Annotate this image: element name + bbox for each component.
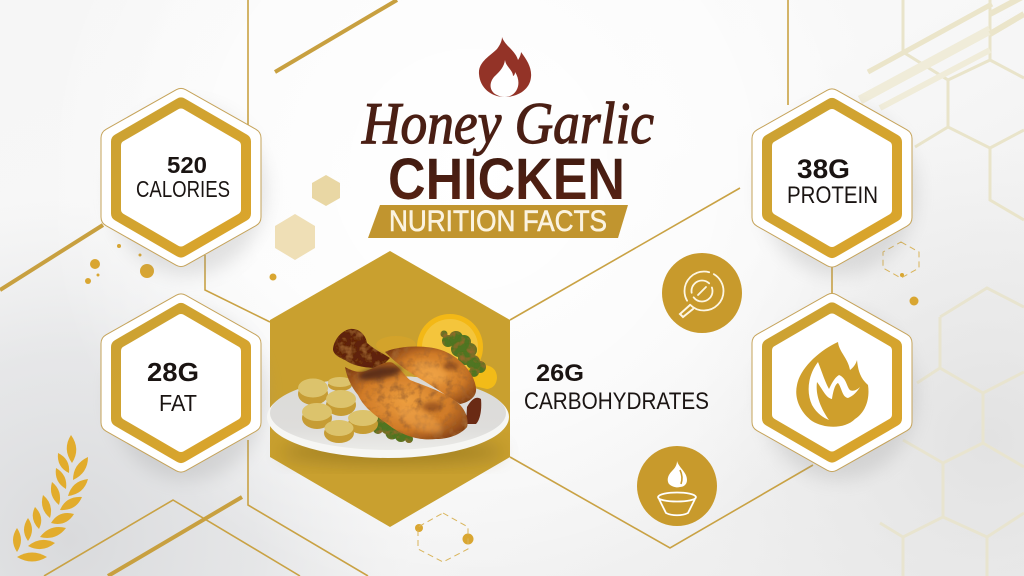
central gold hexagon bbox=[270, 251, 510, 527]
dashed hexagon outlines bbox=[418, 242, 919, 562]
fat value: 28G bbox=[147, 357, 199, 387]
icon: flame logo bbox=[479, 37, 531, 97]
title: CHICKEN: CHICKEN bbox=[388, 147, 625, 212]
calories label: CALORIES bbox=[136, 176, 230, 202]
icon: bowl with flame circle bbox=[637, 446, 717, 526]
icon: pan circle bbox=[662, 253, 742, 333]
carbohydrates label: CARBOHYDRATES bbox=[524, 388, 709, 415]
plate bbox=[267, 376, 509, 458]
plantain slices bbox=[298, 377, 378, 443]
gold connector lines bbox=[44, 0, 832, 576]
icon: flame bbox=[796, 342, 868, 427]
panel: protein hexagon bbox=[761, 99, 917, 275]
chicken pieces bbox=[333, 329, 481, 439]
plate shadow bbox=[280, 440, 504, 464]
wheat icon bbox=[13, 435, 88, 562]
lemon slices bbox=[376, 314, 497, 389]
decorative gold dots bbox=[85, 244, 918, 544]
parsley garnish bbox=[373, 330, 486, 443]
protein value: 38G bbox=[797, 154, 850, 184]
illustration: chicken plate bbox=[267, 314, 509, 464]
subtitle banner: NURITION FACTS bbox=[389, 205, 607, 238]
carbohydrates value: 26G bbox=[536, 360, 584, 387]
calories value: 520 bbox=[167, 152, 207, 178]
title block bbox=[361, 37, 654, 238]
protein label: PROTEIN bbox=[787, 182, 878, 209]
carbohydrates text bbox=[524, 360, 709, 415]
panel: flame hexagon bbox=[761, 304, 917, 480]
thick gold accent lines bbox=[0, 0, 397, 576]
pale honeycomb lines, top right bbox=[860, 0, 1024, 220]
title: Honey Garlic: Honey Garlic bbox=[361, 90, 654, 156]
panel: calories hexagon bbox=[110, 98, 266, 274]
small decorative hexagons bbox=[275, 175, 340, 260]
pale honeycomb lines, bottom right bbox=[880, 288, 1024, 576]
panel: fat hexagon bbox=[110, 304, 266, 480]
fat label: FAT bbox=[159, 390, 197, 416]
